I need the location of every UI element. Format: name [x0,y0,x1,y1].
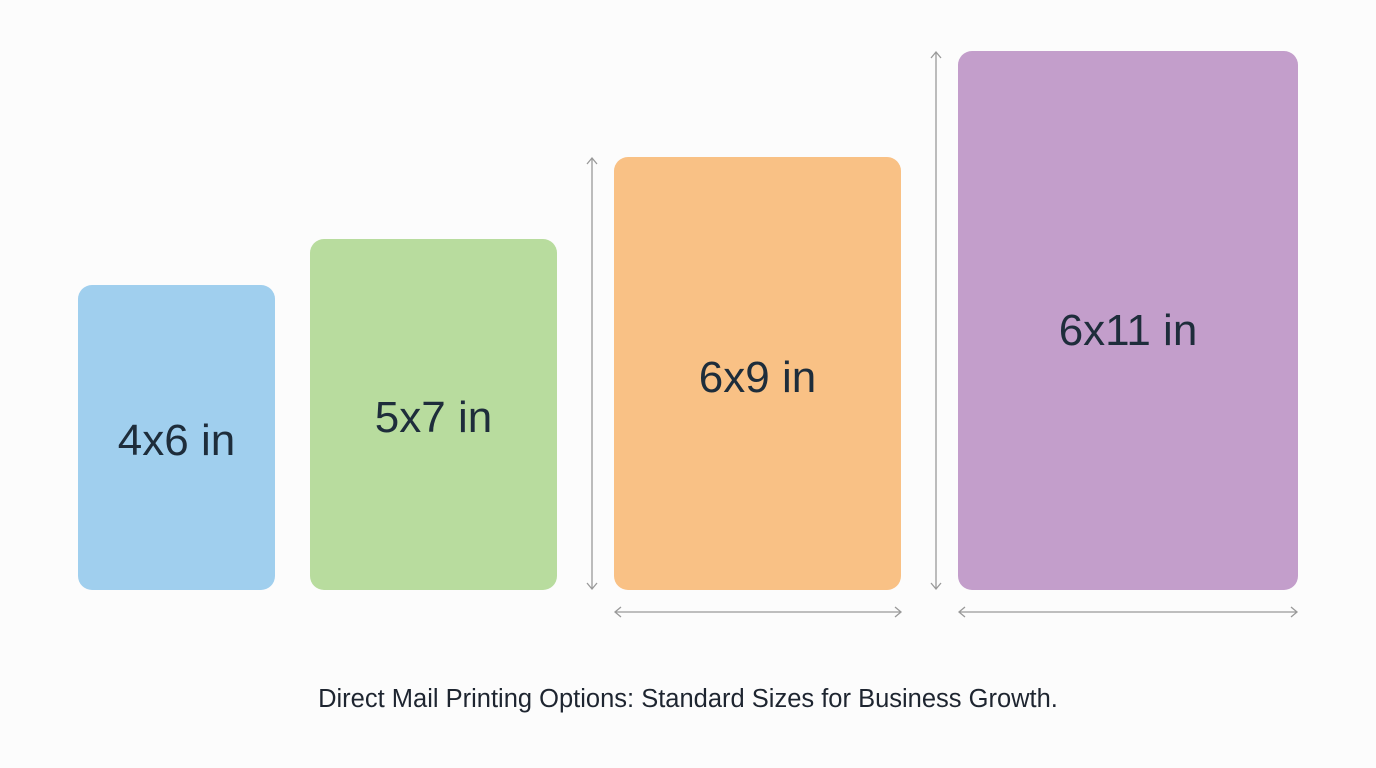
card: 6x9: 6x9 in [699,352,816,402]
card: 6x9 [614,157,901,590]
card: 5x7 [310,239,557,590]
card: 4x6 [78,285,275,590]
card: 5x7: 5x7 in [375,392,492,442]
caption: Direct Mail Printing Options: Standard Sizes for Business Growth. [318,685,1058,713]
card: 6x11 [958,51,1298,590]
card: 4x6: 4x6 in [118,416,235,464]
card: 6x11: 6x11 in [1059,306,1197,354]
